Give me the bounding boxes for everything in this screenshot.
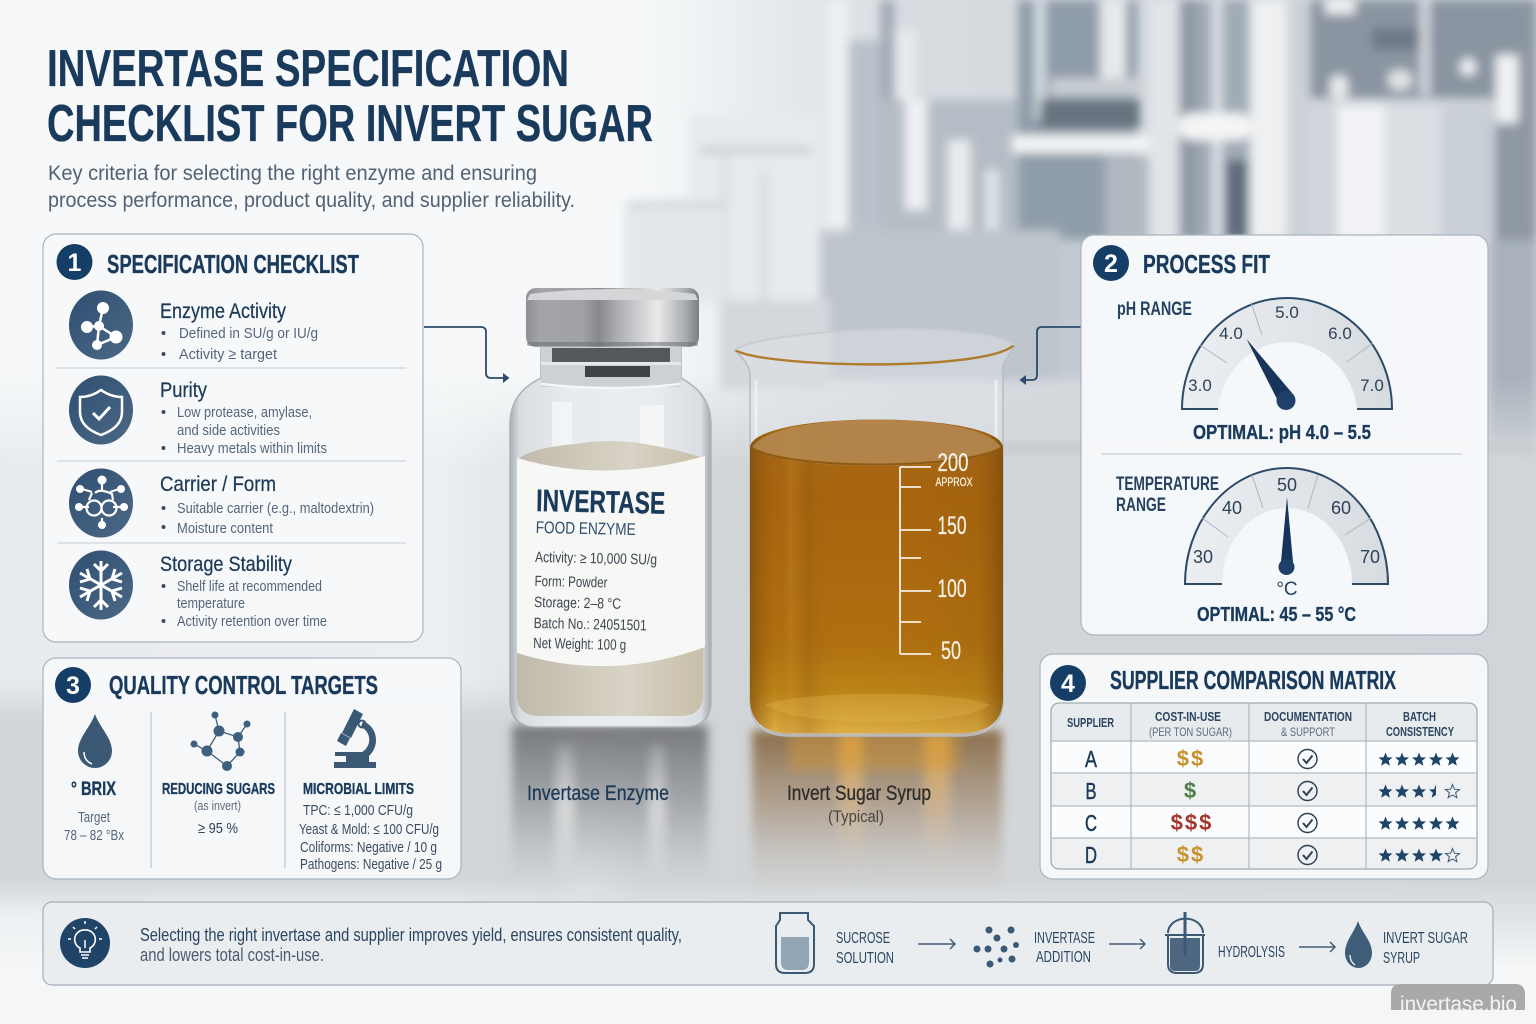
connector arrow: process fit to syrup beaker <box>1020 327 1081 385</box>
volume scale: 150 <box>938 512 966 540</box>
volume scale: 100 <box>938 575 966 603</box>
heading: process fit: PROCESS FIT <box>1143 249 1270 279</box>
cost ratings: $$ <box>1177 746 1205 771</box>
heading: supplier comparison matrix: SUPPLIER COMPARISON MATRIX <box>1110 665 1396 695</box>
reducing sugars target: REDUCING SUGARS <box>162 781 275 798</box>
glass walls <box>735 329 1014 736</box>
step: sucrose solution: SOLUTION <box>836 950 894 967</box>
pH gauge: 3.0 <box>1188 376 1212 395</box>
pH gauge <box>1182 298 1392 410</box>
supplier letters: C <box>1085 810 1097 836</box>
item: storage stability: temperature <box>177 595 245 612</box>
badge 3: 3 <box>66 672 80 700</box>
badge 3 <box>55 667 91 703</box>
pH needle <box>1246 339 1296 410</box>
panel 4: supplier comparison matrix <box>1040 654 1488 879</box>
temperature needle <box>1278 497 1294 575</box>
product label: Form: Powder <box>534 573 608 592</box>
item: storage stability: Activity retention over time <box>177 613 327 630</box>
item: purity: Heavy metals within limits <box>177 440 327 457</box>
temperature gauge: 60 <box>1331 498 1351 518</box>
arrow <box>1109 939 1145 949</box>
panel 3: quality control targets <box>43 658 461 879</box>
microbial limits: MICROBIAL LIMITS <box>303 781 414 798</box>
panel 1: specification checklist <box>43 234 423 642</box>
product label: INVERTASE <box>536 483 666 521</box>
takeaway text: and lowers total cost-in-use. <box>140 945 324 965</box>
footer summary bar <box>43 902 1493 985</box>
caption: invert sugar syrup <box>787 782 931 826</box>
volume scale: APPROX <box>936 475 972 489</box>
item: purity: and side activities <box>177 422 280 439</box>
item: storage stability <box>69 550 327 630</box>
item: purity: Low protease, amylase, <box>177 404 312 421</box>
product label: Net Weight: 100 g <box>533 635 626 654</box>
volume scale <box>900 449 972 665</box>
badge 1 <box>56 244 92 280</box>
badge 1: 1 <box>68 249 82 277</box>
table header: BATCH <box>1403 710 1436 724</box>
temperature optimal range: OPTIMAL: 45 – 55 °C <box>1197 604 1356 626</box>
supplier letters: A <box>1085 746 1098 772</box>
item: enzyme activity: Enzyme Activity <box>160 300 286 323</box>
temperature gauge: 40 <box>1222 498 1242 518</box>
microbial limits: Yeast & Mold: ≤ 100 CFU/g <box>299 821 439 838</box>
process flow <box>776 912 1468 973</box>
pH optimal range: OPTIMAL: pH 4.0 – 5.5 <box>1193 422 1371 444</box>
brix target: ° BRIX <box>71 779 116 800</box>
takeaway text <box>140 925 682 965</box>
steel reflections under jar and beaker <box>512 725 1002 895</box>
reducing sugars target: (as invert) <box>194 799 241 813</box>
cost ratings: $$$ <box>1171 810 1213 835</box>
consistency stars <box>1378 752 1460 862</box>
subtitle: Key criteria for selecting the right enzyme and ensuring <box>48 161 537 185</box>
caption: invert sugar syrup: (Typical) <box>828 807 884 826</box>
brix target: 78 – 82 °Bx <box>64 827 124 844</box>
item: carrier / form <box>69 468 374 538</box>
icon: carrier network <box>69 468 133 538</box>
item: storage stability: Storage Stability <box>160 553 292 576</box>
step: invertase addition: ADDITION <box>1036 949 1091 966</box>
invertase enzyme jar <box>510 288 711 727</box>
item: carrier / form: Carrier / Form <box>160 473 276 496</box>
enzyme powder <box>517 441 703 716</box>
icon: lightbulb <box>60 918 110 968</box>
badge 2: 2 <box>1104 250 1118 278</box>
product label: Activity: ≥ 10,000 SU/g <box>535 549 657 569</box>
title <box>47 40 653 153</box>
step: invert sugar syrup: SYRUP <box>1383 950 1420 967</box>
amber syrup <box>750 420 1003 733</box>
pouring rim <box>735 345 1014 364</box>
item: storage stability: Shelf life at recommended <box>177 578 322 595</box>
item: purity: Purity <box>160 379 207 402</box>
step: invertase addition <box>974 926 1095 968</box>
takeaway text: Selecting the right invertase and supplier improves yield, ensures consistent quality, <box>140 925 682 945</box>
panel 2: process fit <box>1081 235 1488 635</box>
temperature range label: TEMPERATURE <box>1116 474 1219 495</box>
arrow <box>1299 942 1335 952</box>
heading: quality control targets: QUALITY CONTROL TARGETS <box>109 670 378 700</box>
temperature range label <box>1116 474 1219 516</box>
documentation checks <box>1298 750 1317 864</box>
watermark <box>1391 984 1525 1010</box>
supplier letters: D <box>1085 842 1097 868</box>
item: purity <box>69 376 327 457</box>
badge 4 <box>1050 665 1086 701</box>
product label <box>517 456 705 666</box>
badge 2 <box>1093 245 1129 281</box>
cost ratings: $$ <box>1177 842 1205 867</box>
arrow <box>918 939 955 949</box>
temperature gauge: 30 <box>1193 547 1213 567</box>
step: hydrolysis <box>1165 912 1285 973</box>
table header: (PER TON SUGAR) <box>1149 725 1232 739</box>
item: carrier / form: Suitable carrier (e.g., maltodextrin) <box>177 500 374 517</box>
pH gauge: 4.0 <box>1219 324 1243 343</box>
table header: CONSISTENCY <box>1386 725 1454 739</box>
item: enzyme activity: Activity ≥ target <box>179 346 278 363</box>
subtitle: process performance, product quality, and supplier reliability. <box>48 188 575 212</box>
jar glass body <box>510 347 711 727</box>
pH gauge: 6.0 <box>1328 324 1352 343</box>
supplier letters <box>1085 746 1098 868</box>
product label: Batch No.: 24051501 <box>533 615 647 634</box>
icon: snowflake <box>69 550 133 620</box>
temperature gauge: 50 <box>1277 475 1297 495</box>
step: hydrolysis: HYDROLYSIS <box>1218 944 1285 961</box>
caption: invertase enzyme: Invertase Enzyme <box>527 782 669 805</box>
reducing sugars target <box>162 712 275 837</box>
caption: invert sugar syrup: Invert Sugar Syrup <box>787 782 931 805</box>
table header: & SUPPORT <box>1281 725 1336 739</box>
step: sucrose solution: SUCROSE <box>836 930 890 947</box>
cost ratings <box>1171 746 1213 867</box>
volume scale: 50 <box>941 637 961 665</box>
table header <box>1067 710 1454 739</box>
supplier letters: B <box>1086 778 1096 804</box>
pH range label: pH RANGE <box>1117 299 1192 320</box>
microbial limits: Pathogens: Negative / 25 g <box>300 856 442 873</box>
brix target: Target <box>78 809 111 826</box>
temperature range label: RANGE <box>1116 495 1166 516</box>
table header: COST-IN-USE <box>1155 710 1221 724</box>
product label: FOOD ENZYME <box>535 518 636 539</box>
badge 4: 4 <box>1061 670 1075 698</box>
item: enzyme activity <box>69 290 318 363</box>
temperature gauge <box>1185 468 1388 600</box>
title: CHECKLIST FOR INVERT SUGAR <box>47 95 653 153</box>
pH gauge: 7.0 <box>1360 376 1384 395</box>
microbial limits: TPC: ≤ 1,000 CFU/g <box>303 802 413 819</box>
cost ratings: $ <box>1184 778 1196 803</box>
item: carrier / form: Moisture content <box>177 520 274 537</box>
microbial limits: Coliforms: Negative / 10 g <box>300 839 437 856</box>
step: invert sugar syrup: INVERT SUGAR <box>1383 930 1468 947</box>
metal cap <box>526 288 699 347</box>
pH gauge: 5.0 <box>1275 303 1299 322</box>
icon: drop <box>78 714 112 768</box>
connector arrow: checklist to enzyme jar <box>424 327 510 383</box>
subtitle <box>48 161 575 212</box>
jar neck <box>541 347 681 388</box>
temperature gauge: 70 <box>1360 547 1380 567</box>
step: invert sugar syrup <box>1345 921 1468 968</box>
microbial limits <box>299 709 442 873</box>
syrup beaker <box>735 329 1014 736</box>
brix target <box>64 714 124 844</box>
table header: SUPPLIER <box>1067 716 1114 730</box>
step: invertase addition: INVERTASE <box>1034 930 1095 947</box>
watermark: invertase.bio <box>1400 993 1517 1016</box>
icon: shield check <box>69 376 133 444</box>
item: enzyme activity: Defined in SU/g or IU/g <box>179 325 318 342</box>
reducing sugars target: ≥ 95 % <box>198 820 238 837</box>
title: INVERTASE SPECIFICATION <box>47 40 569 98</box>
icon: molecule <box>69 290 133 360</box>
heading: specification checklist: SPECIFICATION CHECKLIST <box>107 249 359 279</box>
icon: sugar molecule <box>190 712 250 771</box>
volume scale: 200 <box>938 449 968 477</box>
icon: microscope <box>334 709 376 768</box>
comparison table <box>1051 703 1477 869</box>
step: sucrose solution <box>776 913 894 973</box>
unit: °C <box>1276 579 1298 600</box>
product label: Storage: 2–8 °C <box>534 594 621 613</box>
table header: DOCUMENTATION <box>1264 710 1352 724</box>
